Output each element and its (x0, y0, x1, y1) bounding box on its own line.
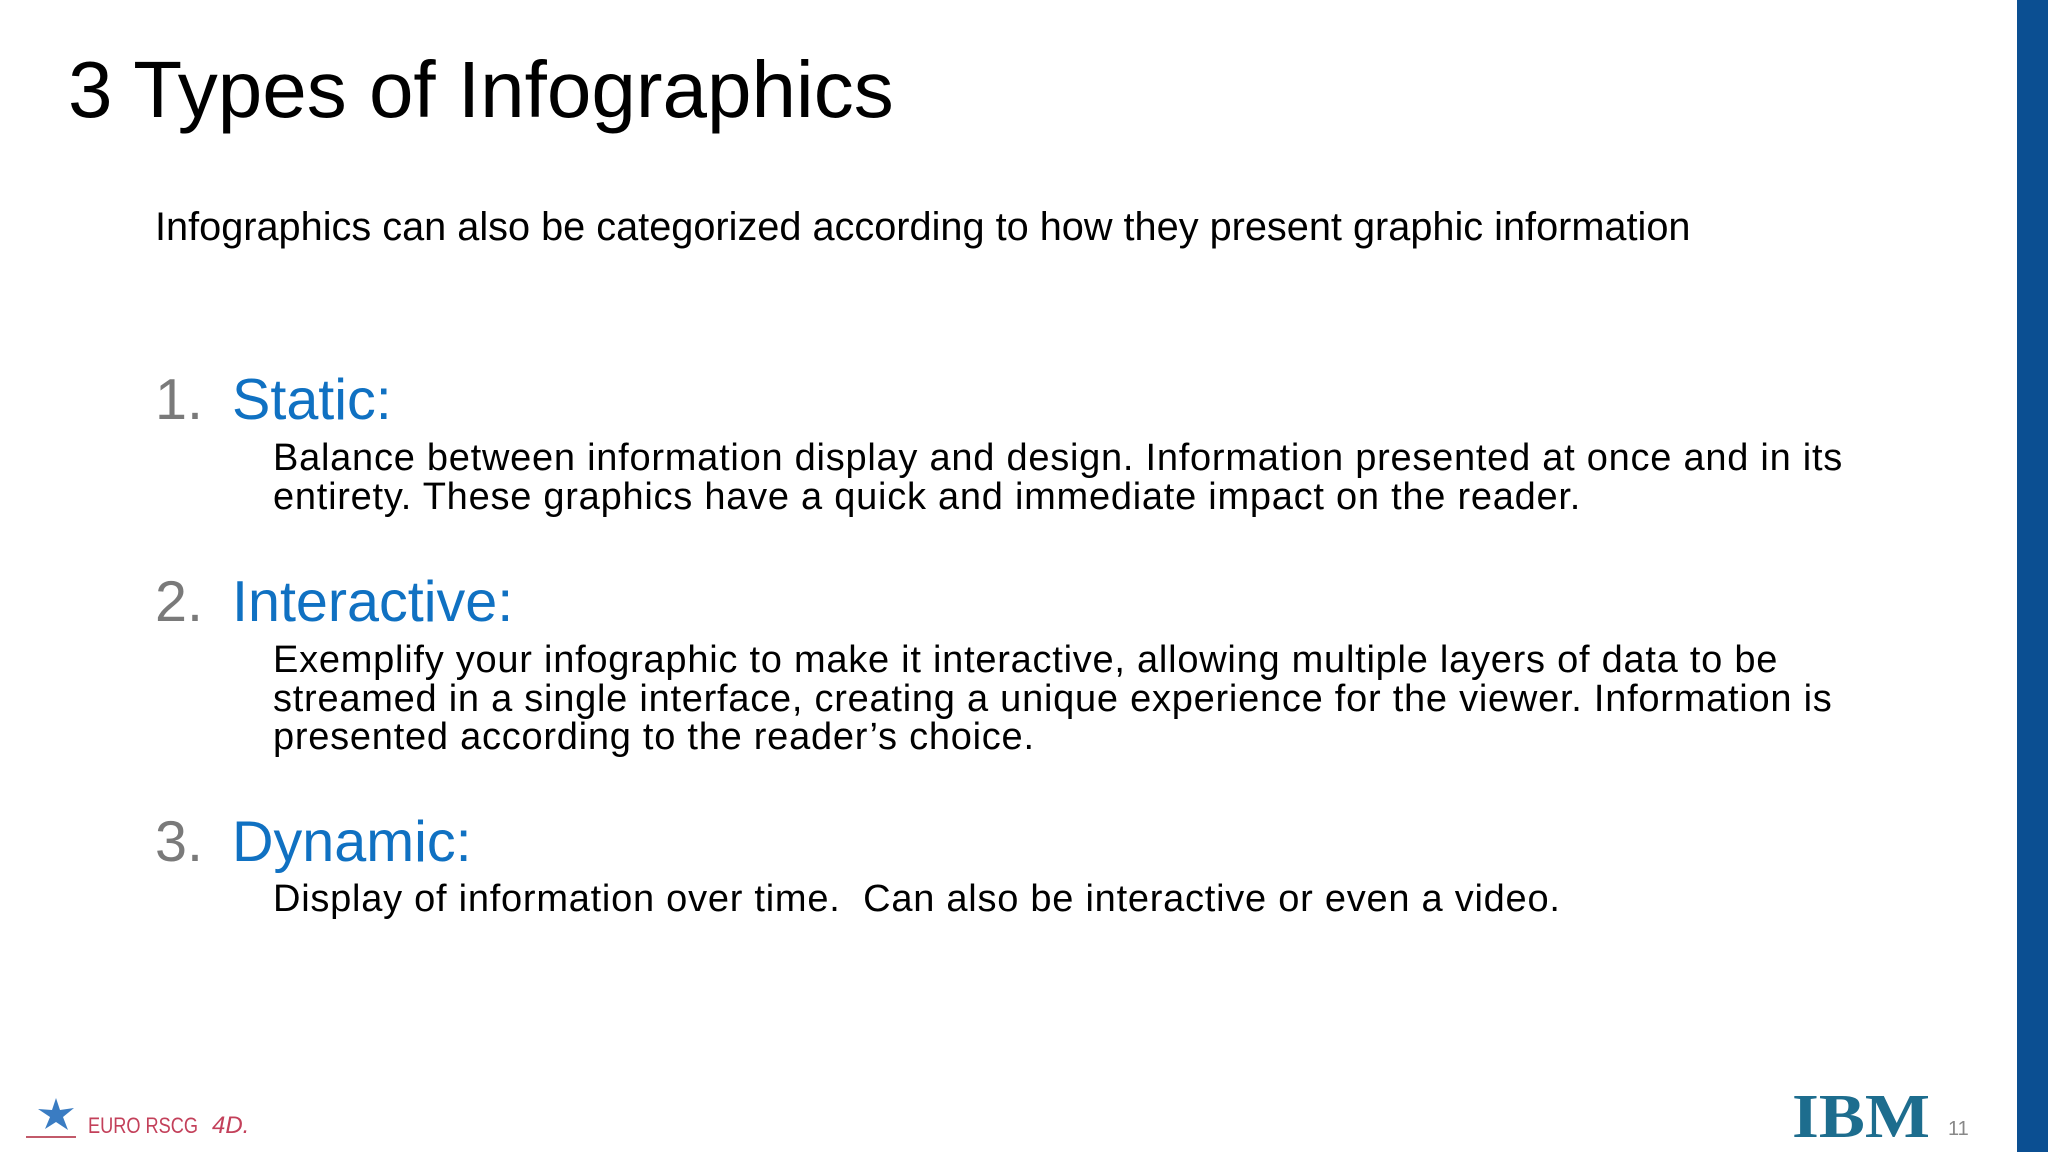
logo: Euro RSCG 4D: EURO RSCG (88, 1113, 198, 1138)
item 1 heading (155, 368, 392, 432)
item 3 body: Display of information over time. Can also be interactive or even a video. (273, 878, 1561, 920)
item 3 heading: 3. (155, 810, 203, 874)
item 1 body: Balance between information display and design. Information presented at once and in its (273, 437, 1843, 479)
item 1 body: entirety. These graphics have a quick and immediate impact on the reader. (273, 476, 1581, 518)
item 3 heading (155, 810, 472, 874)
item 2 body: Exemplify your infographic to make it interactive, allowing multiple layers of data to be (273, 639, 1778, 681)
logo: Euro RSCG 4D: 4D. (212, 1112, 249, 1139)
item 2 body (273, 639, 1833, 758)
text: Interactive: (232, 570, 513, 634)
side bar (2017, 0, 2048, 1152)
title: 3 Types of Infographics (68, 45, 894, 134)
item 2 body: streamed in a single interface, creating a unique experience for the viewer. Information is (273, 678, 1833, 720)
text: Dynamic: (232, 810, 472, 874)
item 2 body: presented according to the reader’s choice. (273, 716, 1035, 758)
item 2 heading (155, 570, 513, 634)
subtitle: Infographics can also be categorized according to how they present graphic information (155, 205, 1690, 249)
item 1 body (273, 437, 1843, 518)
page number: 11 (1948, 1118, 1969, 1140)
item 1 heading: 1. (155, 368, 203, 432)
logo: Euro RSCG 4D (26, 1098, 249, 1139)
text: Static: (232, 368, 392, 432)
item 2 heading: 2. (155, 570, 203, 634)
